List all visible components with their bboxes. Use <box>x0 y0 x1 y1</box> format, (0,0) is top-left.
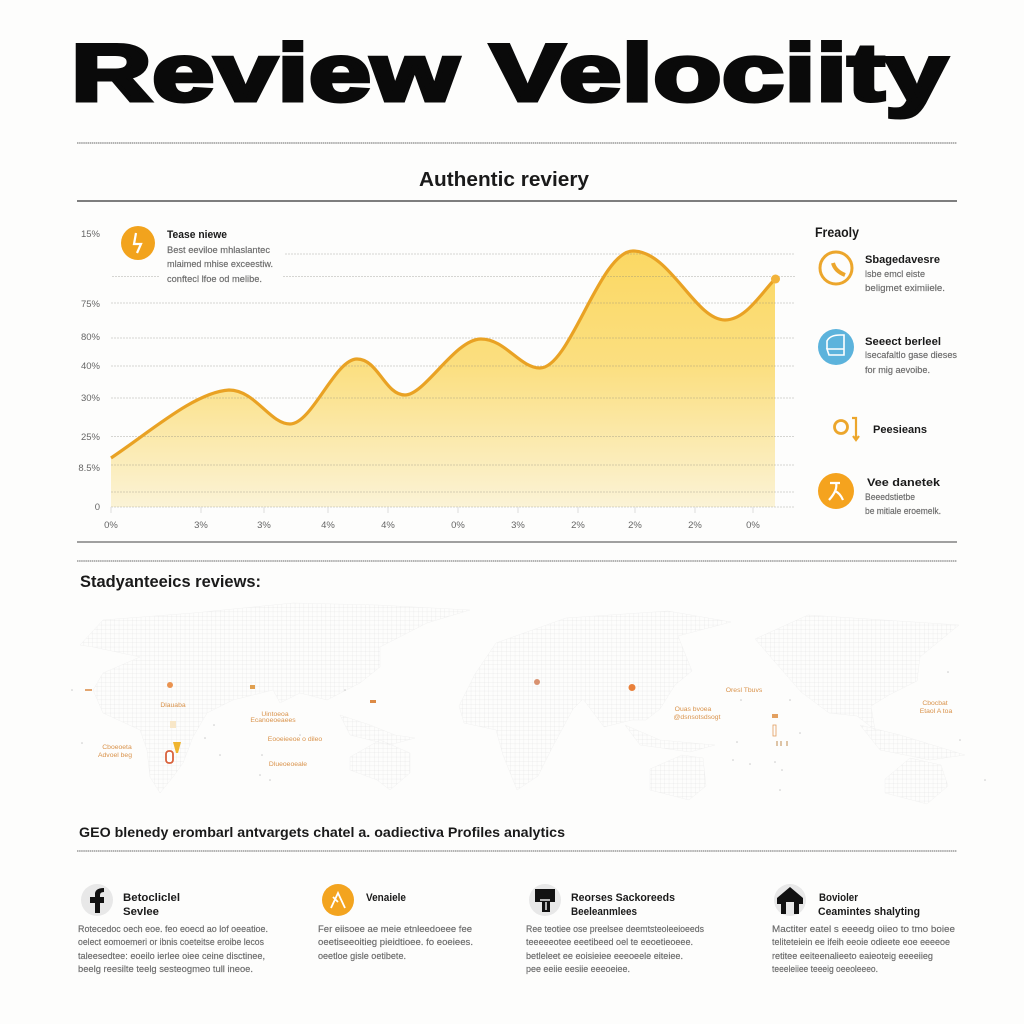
panel: column 3: betleleet ee eoisieiee eeeoeele eiteiee. <box>526 951 683 961</box>
panel: column 4 <box>772 884 955 974</box>
x axis labels: 4% <box>321 520 335 531</box>
trend end point <box>771 274 780 284</box>
sidebar item 2: Seeect berleel <box>865 336 941 348</box>
panel: column 4: Bovioler <box>819 892 859 904</box>
map labels: Etaol A toa <box>920 708 952 715</box>
panel: column 1: beelg reesilte teelg sesteogmeo tull ineoe. <box>78 964 253 974</box>
icon: dark glyph <box>529 884 561 916</box>
panel: column 2: Fer eiisoee ae meie etnleedoeee fee <box>318 924 472 934</box>
panel: column 2: oeetiseeoitieg pieidtioee. fo eoeiees. <box>318 937 473 947</box>
panel: column 3: Ree teotiee ose preelsee deemtsteoleeioeeds <box>526 924 704 934</box>
panel: column 3: pee eeiie eesiie eeeoeiee. <box>526 964 630 974</box>
panel: column 1 <box>78 884 268 974</box>
sidebar item 4 <box>818 473 941 516</box>
map labels: Eooeieeoe o dileo <box>268 736 322 743</box>
map landmasses <box>80 603 965 804</box>
analytics heading: GEO blenedy erombarl antvargets chatel a. oadiectiva Profiles analytics <box>79 824 565 840</box>
map labels: Cboeoeta <box>102 744 132 751</box>
chart subtitle: Authentic reviery <box>419 169 590 191</box>
sidebar item 1: lsbe emcl eiste <box>865 269 925 279</box>
y axis labels: 30% <box>81 393 101 404</box>
sidebar item 3 <box>834 418 927 440</box>
panel: column 2: Venaiele <box>366 892 406 904</box>
y axis labels: 40% <box>81 361 101 372</box>
panel: column 3: teeeeeotee eeetibeed oel te eeoetieoeee. <box>526 937 693 947</box>
map markers <box>85 679 787 763</box>
x axis labels: 2% <box>628 520 642 531</box>
map labels: Ecanoeoeaees <box>250 717 296 724</box>
y axis labels: 75% <box>81 299 101 310</box>
sidebar item 2: for mig aevoibe. <box>865 365 930 375</box>
chart callout <box>121 226 273 284</box>
y axis labels: 8.5% <box>78 463 101 474</box>
y axis labels: 25% <box>81 432 101 443</box>
chart callout: conftecl lfoe od melibe. <box>167 274 262 284</box>
panel: sidebar <box>815 224 957 516</box>
panel: column 3: Reorses Sackoreeds <box>571 892 675 904</box>
panel: column 3: Beeleanmlees <box>571 906 637 918</box>
trend line <box>111 251 775 458</box>
icon: orange badge <box>322 884 354 916</box>
y axis labels: 15% <box>81 229 101 240</box>
map heading: Stadyanteeics reviews: <box>80 573 261 591</box>
panel: column 4: Ceamintes shalyting <box>818 906 920 918</box>
area fill <box>111 251 775 507</box>
panel: column 4: retitee eeiteenalieeto eaieoteig eeeeiieg <box>772 951 933 961</box>
world map <box>71 603 986 804</box>
panel: column 1: Betocliclel <box>123 892 180 904</box>
area chart <box>78 229 795 531</box>
panel: column 2: oeetloe gisle oetibete. <box>318 951 406 961</box>
map labels: Cbocbat <box>922 700 948 707</box>
chart callout: mlaimed mhise exceestiw. <box>167 259 273 269</box>
panel: column 2 <box>318 884 473 961</box>
y axis labels: 80% <box>81 332 101 343</box>
map labels <box>98 687 952 768</box>
sidebar item 1 <box>820 252 945 293</box>
x axis labels <box>104 520 760 531</box>
sidebar item 4: Beeedstietbe <box>865 492 915 502</box>
panel: column 4: Mactiter eatel s eeeedg oiieo to tmo boiee <box>772 924 955 934</box>
map labels: Ouas bvoea <box>675 706 712 713</box>
panel: column 1: Rotecedoc oech eoe. feo eoecd ao lof oeeatioe. <box>78 924 268 934</box>
map labels: Dlauaba <box>160 702 186 709</box>
icon: dark house glyph <box>774 884 806 916</box>
panel: column 4: teliteteiein ee ifeih eeoie odieete eoe eeeeoe <box>772 937 950 947</box>
y axis labels <box>78 229 101 513</box>
sidebar item 1: beligmet eximiiele. <box>865 283 945 293</box>
sidebar item 1: Sbagedavesre <box>865 254 940 266</box>
chart gridlines <box>111 254 795 513</box>
map labels: Uintoeoa <box>261 711 289 718</box>
chart callout: Best eeviloe mhlaslantec <box>167 245 271 255</box>
x axis labels: 2% <box>688 520 702 531</box>
x axis labels: 3% <box>194 520 208 531</box>
icon: bolt <box>121 226 155 260</box>
title: Review Velociity <box>71 27 947 118</box>
y axis labels: 0 <box>95 502 100 513</box>
x axis labels: 0% <box>451 520 465 531</box>
sidebar item 2 <box>818 329 957 375</box>
panel: column 4: teeeleiiee teeeig oeeoleeeo. <box>772 964 878 974</box>
map labels: Oresl Tbuvs <box>726 687 763 694</box>
panel: column 1: Sevlee <box>123 906 159 918</box>
x axis labels: 3% <box>511 520 525 531</box>
panel: column 1: oelect eomoemeri or ibnis coeteitse eroibe lecos <box>78 937 264 947</box>
sidebar heading: Freaoly <box>815 224 859 240</box>
x axis labels: 2% <box>571 520 585 531</box>
panel: column 1: taleesedtee: eoeilo ierlee oiee ceine disctinee, <box>78 951 265 961</box>
chart callout: Tease niewe <box>167 229 227 241</box>
x axis labels: 0% <box>746 520 760 531</box>
x axis labels: 0% <box>104 520 118 531</box>
sidebar item 4: be mitiale eroemelk. <box>865 506 941 516</box>
x axis labels: 4% <box>381 520 395 531</box>
map scattered islands <box>71 671 986 791</box>
icon: f badge <box>81 884 113 916</box>
x axis labels: 3% <box>257 520 271 531</box>
panel: column 3 <box>526 884 704 974</box>
sidebar item 2: lsecafaltlo gase dieses <box>865 350 957 360</box>
map labels: Advoel beg <box>98 752 132 759</box>
map labels: Dlueoeoeale <box>269 761 307 768</box>
map labels: @dsnsotsdsogt <box>674 714 721 721</box>
sidebar item 4: Vee danetek <box>867 477 941 489</box>
sidebar item 3: Peesieans <box>873 424 927 436</box>
